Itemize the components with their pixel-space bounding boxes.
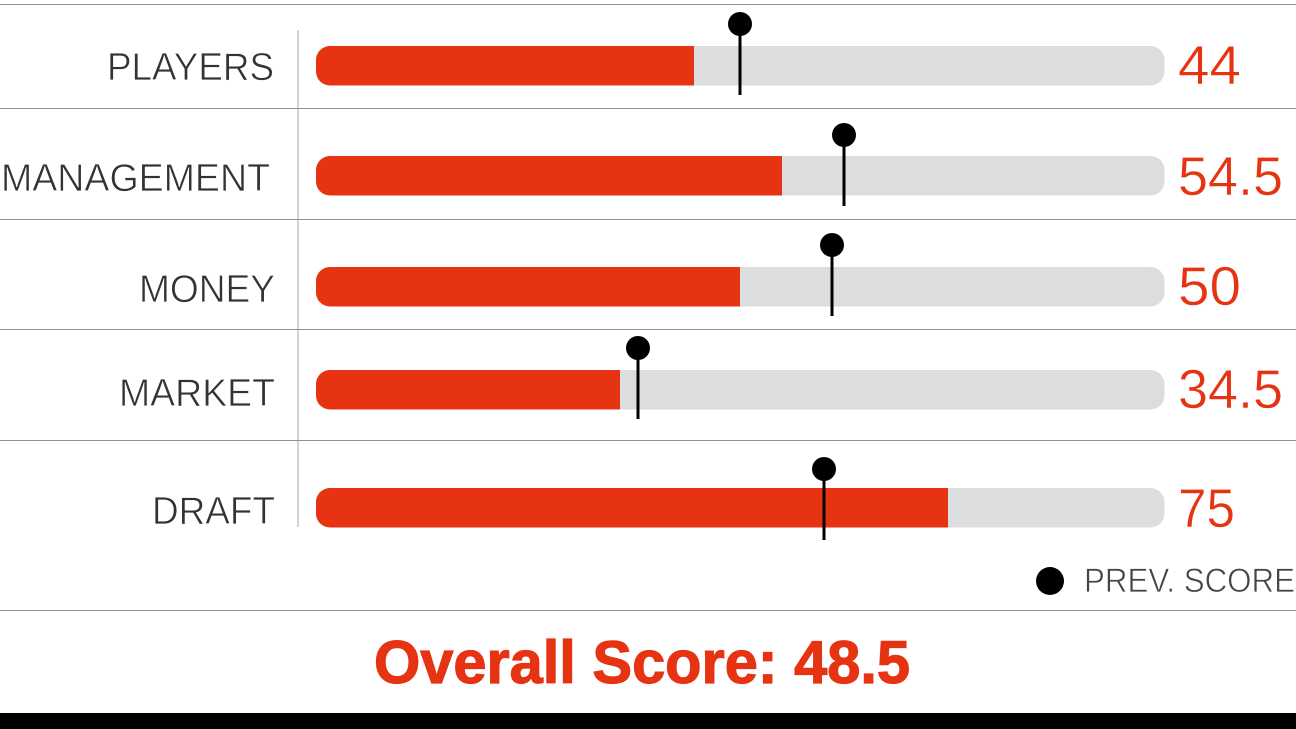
row: money: 50 [1178, 255, 1241, 317]
row: money: MONEY [139, 268, 275, 311]
row: players [107, 12, 1241, 96]
row: money [139, 233, 1241, 317]
row: draft: DRAFT [152, 490, 275, 533]
row: management: MANAGEMENT [1, 157, 270, 200]
row: draft [152, 457, 1235, 540]
row: management [1, 123, 1283, 207]
row: players: PLAYERS [107, 46, 274, 89]
row: market: 34.5 [1178, 358, 1283, 420]
row: draft: 75 [1178, 477, 1235, 539]
overall score: Overall Score: 48.5 [374, 629, 910, 696]
row: market: MARKET [119, 372, 275, 415]
row: players: 44 [1178, 34, 1241, 96]
row: market [119, 336, 1283, 420]
bottom black band [0, 713, 1296, 729]
row: management: 54.5 [1178, 145, 1283, 207]
